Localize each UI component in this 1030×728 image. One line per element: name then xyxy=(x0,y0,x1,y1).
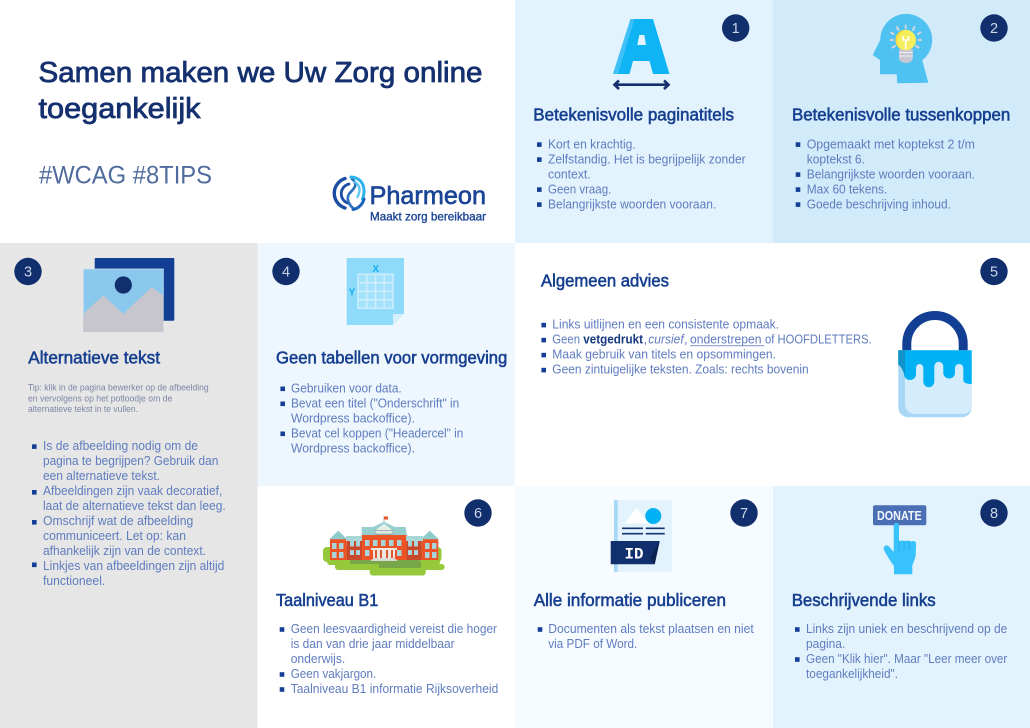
list 1: Kort en krachtig. xyxy=(548,136,636,151)
logo: Pharmeon: Pharmeon xyxy=(370,182,486,210)
list 3: pagina te begrijpen? Gebruik dan xyxy=(43,453,218,468)
panel: intro xyxy=(0,0,515,243)
list 1: Belangrijkste woorden vooraan. xyxy=(548,196,716,211)
heading 2: Betekenisvolle tussenkoppen xyxy=(792,104,1010,124)
list 5: Maak gebruik van titels en opsommingen. xyxy=(552,347,776,362)
list 1 xyxy=(537,136,746,211)
list 8 xyxy=(795,621,1008,681)
list 8: toegankelijkheid". xyxy=(806,666,898,681)
badge 7 xyxy=(730,499,758,527)
list 5: of HOOFDLETTERS. xyxy=(765,332,872,347)
title: toegankelijk xyxy=(38,93,201,125)
badge 8: 8 xyxy=(990,506,998,522)
list 4: Wordpress backoffice). xyxy=(291,440,415,455)
list 2: koptekst 6. xyxy=(807,151,865,166)
list 5: vetgedrukt xyxy=(583,332,644,347)
list 5: cursief xyxy=(648,332,685,347)
list 2: Max 60 tekens. xyxy=(807,181,887,196)
icon: donate button with hand: DONATE xyxy=(877,509,922,523)
list 2 xyxy=(796,136,975,211)
list 4 xyxy=(280,380,463,455)
tip text: Tip: klik in de pagina bewerker op de afbeelding xyxy=(28,382,209,392)
panel 5: algemeen advies xyxy=(515,243,1030,486)
icon: donate button with hand xyxy=(873,505,926,574)
badge 3: 3 xyxy=(24,265,32,281)
icon: ID document xyxy=(611,500,672,572)
list 5: , xyxy=(684,332,688,347)
list 6: Geen vakjargon. xyxy=(291,666,376,681)
heading 5: Algemeen advies xyxy=(541,271,669,291)
panel 1: paginatitels xyxy=(515,0,773,243)
list 3: functioneel. xyxy=(43,573,105,588)
tip text xyxy=(28,382,209,414)
badge 2: 2 xyxy=(990,21,998,37)
list 3: Linkjes van afbeeldingen zijn altijd xyxy=(43,558,224,573)
list 5: Geen zintuigelijke teksten. Zoals: rechts bovenin xyxy=(552,362,809,377)
list 4: Bevat cel koppen ("Headercel" in xyxy=(291,425,463,440)
icon: table sheet: Y xyxy=(349,288,356,298)
list 6: is dan van drie jaar middelbaar xyxy=(291,636,455,651)
panel 7: publiceren xyxy=(515,486,773,728)
list 8: pagina. xyxy=(806,636,845,651)
badge 6 xyxy=(464,499,492,527)
panel 8: links xyxy=(773,486,1030,728)
heading 1: Betekenisvolle paginatitels xyxy=(533,104,734,124)
list 6: Geen leesvaardigheid vereist die hoger xyxy=(291,621,498,636)
icon: table sheet xyxy=(347,258,404,325)
list 3: laat de alternatieve tekst dan leeg. xyxy=(43,498,226,513)
heading 8: Beschrijvende links xyxy=(792,590,936,610)
list 7: Documenten als tekst plaatsen en niet xyxy=(548,621,754,636)
list 4: Gebruiken voor data. xyxy=(291,380,402,395)
list 5: , xyxy=(644,332,647,347)
badge 5 xyxy=(980,258,1008,285)
hashtags: #WCAG #8TIPS xyxy=(39,162,212,190)
badge 1 xyxy=(722,14,749,42)
list 8: Links zijn uniek en beschrijvend op de xyxy=(806,621,1007,636)
badge 1: 1 xyxy=(732,21,740,37)
tip text: en vervolgens op het potloodje om de xyxy=(28,393,172,403)
icon: school building xyxy=(323,516,445,576)
badge 6: 6 xyxy=(474,506,482,522)
list 6: onderwijs. xyxy=(291,651,345,666)
list 5: onderstrepen xyxy=(690,332,762,347)
list 2: Opgemaakt met koptekst 2 t/m xyxy=(807,136,975,151)
heading 6: Taalniveau B1 xyxy=(276,590,378,610)
list 3: communiceert. Let op: kan xyxy=(43,528,186,543)
panel 6: taalniveau xyxy=(258,486,515,728)
badge 2 xyxy=(980,14,1008,42)
badge 5: 5 xyxy=(990,265,998,281)
icon: table sheet: X xyxy=(372,264,379,275)
list 3: Is de afbeelding nodig om de xyxy=(43,438,198,453)
list 2: Goede beschrijving inhoud. xyxy=(807,196,951,211)
list 3: Afbeeldingen zijn vaak decoratief, xyxy=(43,483,222,498)
list 2: Belangrijkste woorden vooraan. xyxy=(807,166,975,181)
list 3: een alternatieve tekst. xyxy=(43,468,160,483)
panel 4: tabellen xyxy=(258,243,515,486)
icon: picture xyxy=(83,258,174,332)
badge 8 xyxy=(980,499,1008,527)
list 4: Wordpress backoffice). xyxy=(291,410,415,425)
badge 3 xyxy=(14,258,42,285)
icon: paint bucket xyxy=(898,316,972,417)
list 6 xyxy=(280,621,498,696)
list 3 xyxy=(32,438,226,588)
list 5: Geen xyxy=(552,332,580,347)
list 1: Zelfstandig. Het is begrijpelijk zonder xyxy=(548,151,746,166)
icon: ID document: ID xyxy=(624,546,644,564)
icon: head with light bulb xyxy=(873,14,932,83)
list 7 xyxy=(538,621,754,651)
title: Samen maken we Uw Zorg online xyxy=(38,57,482,89)
badge 4: 4 xyxy=(282,265,290,281)
logo: Pharmeon: Maakt zorg bereikbaar xyxy=(370,210,486,224)
list 5: Links uitlijnen en een consistente opmaak. xyxy=(552,317,779,332)
list 3: Omschrijf wat de afbeelding xyxy=(43,513,193,528)
heading 7: Alle informatie publiceren xyxy=(534,590,726,610)
badge 7: 7 xyxy=(740,506,748,522)
list 8: Geen "Klik hier". Maar "Leer meer over xyxy=(806,651,1008,666)
list 1: Geen vraag. xyxy=(548,181,611,196)
tip text: alternatieve tekst in te vullen. xyxy=(28,404,138,414)
list 4: Bevat een titel ("Onderschrift" in xyxy=(291,395,459,410)
icon: letter A with arrow xyxy=(613,19,670,89)
panel 3: alternatieve tekst xyxy=(0,243,258,728)
list 1: context. xyxy=(548,166,591,181)
heading 3: Alternatieve tekst xyxy=(28,348,160,368)
list 6: Taalniveau B1 informatie Rijksoverheid xyxy=(291,681,498,696)
list 3: afhankelijk zijn van de context. xyxy=(43,543,206,558)
list 7: via PDF of Word. xyxy=(548,636,637,651)
title xyxy=(38,57,482,125)
list 5 xyxy=(541,317,872,377)
heading 4: Geen tabellen voor vormgeving xyxy=(276,348,507,368)
logo: Pharmeon xyxy=(334,177,486,224)
panel 2: tussenkoppen xyxy=(773,0,1030,243)
badge 4 xyxy=(272,258,300,285)
